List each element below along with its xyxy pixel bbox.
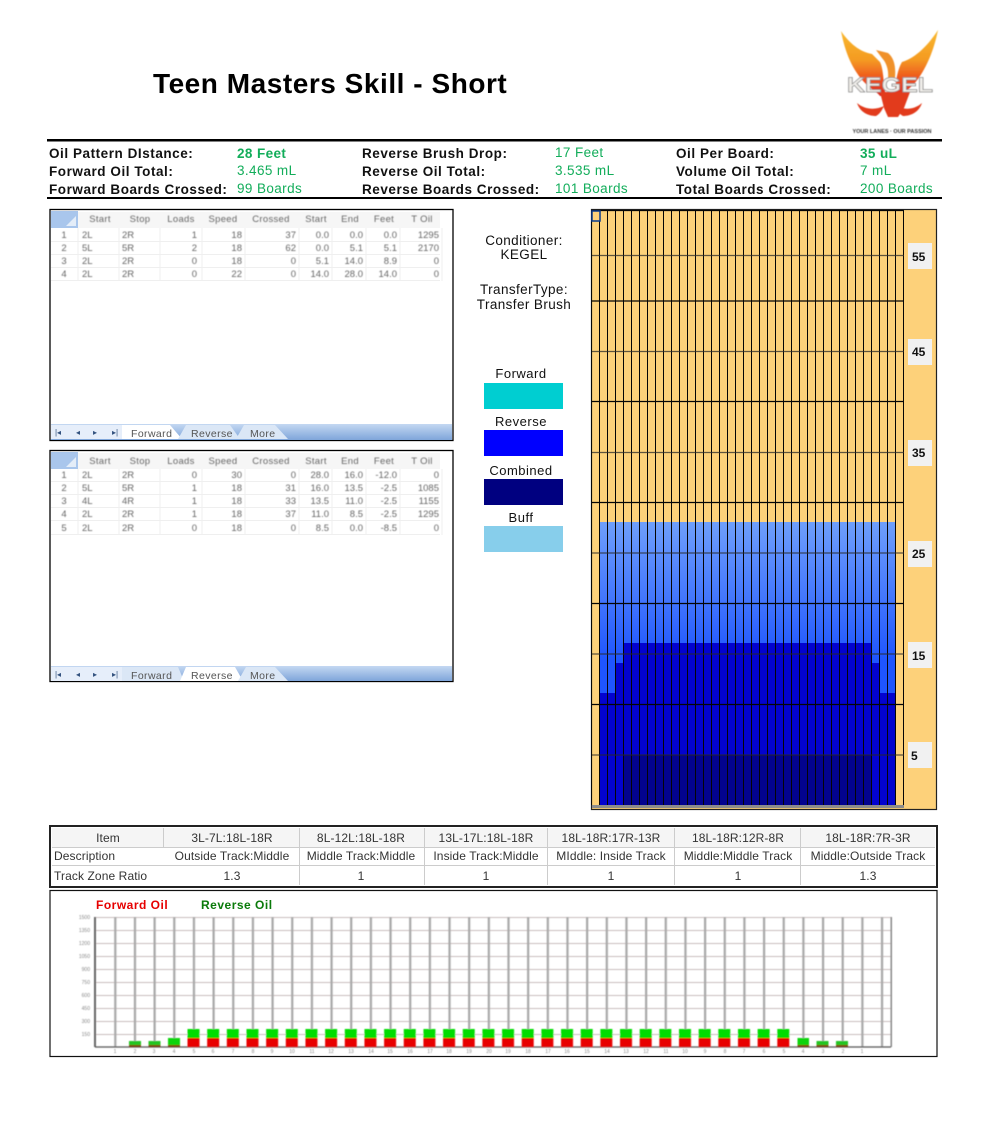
header stats: Forward Oil Total: [49,164,173,179]
panel: reverse table: 11.0 [311,509,329,520]
chart legend: Forward Oil [96,898,168,912]
chart plot: 14 [604,1049,610,1055]
panel: reverse table: 2R [122,523,134,534]
chart plot: 1 [861,1049,864,1055]
distance labels: 15 [912,649,926,663]
chart legend [96,898,273,912]
header stats [49,145,933,197]
panel: forward table: Feet [374,214,394,225]
transfer type text [477,282,571,312]
panel: reverse table: 8.5 [350,509,363,520]
panel: reverse table: 18 [231,509,242,520]
panel: forward table: 2 [192,243,197,254]
panel: reverse table: 2R [122,470,134,481]
header stats: 99 Boards [237,181,302,196]
chart plot: 10 [682,1049,688,1055]
panel: reverse table [50,450,453,682]
panel: reverse table: Start [89,456,111,467]
chart plot: 19 [505,1049,511,1055]
track zone ratio table: 1 [608,869,615,883]
panel: forward table: 62 [285,243,296,254]
panel: reverse table: 37 [285,509,296,520]
panel: forward table: 2R [122,269,134,280]
panel: reverse table: 0 [192,523,197,534]
panel: reverse table: Loads [167,456,195,467]
chart plot: 12 [328,1049,334,1055]
track zone ratio table: 18L-18R:12R-8R [692,831,784,845]
lane board lines [591,210,904,805]
panel: reverse table: 4 [61,509,67,520]
distance labels: 35 [912,446,926,460]
track zone ratio table: 8L-12L:18L-18R [317,831,405,845]
panel: reverse table: 18 [231,483,242,494]
header stats: Volume Oil Total: [676,164,794,179]
panel: forward table: 28.0 [344,269,363,280]
track zone ratio table: 13L-17L:18L-18R [439,831,534,845]
panel: forward table: Speed [209,214,237,225]
chart plot: 450 [82,1006,90,1012]
panel: forward table: 5.1 [316,256,329,267]
header rule top [47,139,942,142]
legend: Combined [489,463,553,478]
panel: forward table: 0.0 [350,230,363,241]
header stats: Forward Boards Crossed: [49,182,227,197]
conditioner text: Conditioner: [485,233,563,248]
track zone ratio table: 18L-18R:17R-13R [562,831,661,845]
panel: reverse table: 33 [285,496,296,507]
chart plot: 11 [663,1049,669,1055]
panel: forward table: Start [89,214,111,225]
panel: reverse table: 0 [434,523,439,534]
panel: forward table: 5R [122,243,134,254]
panel: reverse table: T Oil [411,456,433,467]
header stats: Reverse Oil Total: [362,164,486,179]
tab bar: reverse: |◂ [55,670,61,679]
chart plot: 13 [623,1049,629,1055]
distance labels: 55 [912,250,926,264]
chart plot: 300 [82,1019,90,1025]
panel: forward table: 3 [61,256,67,267]
track zone ratio table: 1 [358,869,365,883]
transfer type text: TransferType: [480,282,568,297]
panel: forward table: 5.1 [384,243,397,254]
panel: forward table: Stop [130,214,150,225]
panel: forward table: 14.0 [378,269,397,280]
track zone ratio table: Track Zone Ratio [54,869,147,883]
chart plot: 7 [232,1049,235,1055]
tab bar: forward: |◂ [55,428,61,437]
panel: forward table: 37 [285,230,296,241]
panel: forward table: 5.1 [350,243,363,254]
chart plot: 4 [802,1049,805,1055]
panel: reverse table: -8.5 [381,523,397,534]
panel: forward table: 0.0 [316,243,329,254]
chart plot: 20 [486,1049,492,1055]
chart plot: 8 [724,1049,727,1055]
panel: reverse table: 8.5 [316,523,329,534]
header stats: 35 uL [860,146,897,161]
track zone ratio table [50,826,937,887]
header stats: Oil Per Board: [676,146,774,161]
panel: reverse table: -2.5 [381,483,397,494]
panel: reverse table: -2.5 [381,509,397,520]
panel: forward table: 14.0 [344,256,363,267]
panel: forward table: 22 [231,269,242,280]
chart plot: 1050 [79,954,90,960]
header stats: Oil Pattern DIstance: [49,146,193,161]
chart plot: 18 [446,1049,452,1055]
legend [484,366,563,552]
panel: reverse table: Crossed [252,456,290,467]
chart plot: 900 [82,967,90,973]
panel: reverse table: 1 [61,470,67,481]
panel: forward table: End [341,214,359,225]
chart plot: 13 [348,1049,354,1055]
transfer type text: Transfer Brush [477,297,571,312]
legend: Buff [509,510,533,525]
panel: reverse table: 3 [61,496,67,507]
panel: reverse table: 11.0 [345,496,363,507]
oil: forward medium layer [599,643,896,805]
panel: reverse table: -12.0 [375,470,397,481]
track zone ratio table: 1.3 [860,869,877,883]
tab bar: forward: Reverse [191,428,233,440]
distance labels: 5 [911,749,918,763]
chart plot: 7 [743,1049,746,1055]
panel: forward table: 0 [434,269,439,280]
tab bar: reverse: ▸ [93,670,97,679]
header stats: 28 Feet [237,146,286,161]
track zone ratio table: Outside Track:Middle [175,849,290,863]
oil bar chart panel [50,890,937,1056]
header stats: 101 Boards [555,181,628,196]
chart plot: 12 [643,1049,649,1055]
panel: reverse table: 4L [82,496,93,507]
panel: reverse table: 2R [122,509,134,520]
panel: forward table: 1 [61,230,67,241]
panel: reverse table: Speed [209,456,237,467]
tab bar: reverse: Forward [131,670,172,682]
chart plot: 2 [842,1049,845,1055]
chart plot: 3 [822,1049,825,1055]
panel: forward table: 14.0 [310,269,329,280]
panel: reverse table: 5R [122,483,134,494]
chart plot: 10 [289,1049,295,1055]
panel: forward table: 8.9 [384,256,397,267]
tab bar: reverse [51,666,452,682]
panel: reverse table: 2 [61,483,67,494]
panel: reverse table: End [341,456,359,467]
legend: Forward [495,366,547,381]
chart plot: 6 [763,1049,766,1055]
panel: reverse table: 1 [192,483,197,494]
tab bar: forward: More [250,428,276,440]
oil: combined dark layer [623,755,872,805]
panel: reverse table: 31 [285,483,296,494]
tab bar: forward: Forward [131,428,172,440]
oil: reverse light layer [599,522,896,805]
panel: reverse table: 0 [291,523,296,534]
panel: forward table: 1 [192,230,197,241]
chart plot [79,915,892,1055]
chart plot: 1200 [79,941,90,947]
chart plot: 5 [193,1049,196,1055]
logo: Kegel phoenix: YOUR LANES · OUR PASSION [852,129,932,135]
track zone ratio table: 1 [735,869,742,883]
panel: reverse table: 2L [82,470,93,481]
panel: forward table: 4 [61,269,67,280]
tab bar: reverse: ◂ [76,670,80,679]
header stats: 17 Feet [555,145,604,160]
chart plot: 14 [368,1049,374,1055]
track zone ratio table: Middle:Outside Track [811,849,926,863]
distance lines: labelled [592,256,904,755]
chart plot: 600 [82,993,90,999]
chart plot: 9 [704,1049,707,1055]
panel: forward table: 18 [231,256,242,267]
chart plot: 5 [783,1049,786,1055]
chart plot: 8 [252,1049,255,1055]
chart plot: 750 [82,980,90,986]
distance labels [908,243,932,768]
panel: reverse table: 4R [122,496,134,507]
track zone ratio table: 1.3 [224,869,241,883]
track zone ratio table: Item [96,831,120,845]
chart plot: 1350 [79,928,90,934]
chart plot: 16 [564,1049,570,1055]
chart plot: 11 [309,1049,315,1055]
tab bar: reverse: ▸| [112,670,118,679]
panel: forward table: 2L [82,256,93,267]
panel: reverse table: 2L [82,523,93,534]
conditioner text [485,233,563,262]
panel: reverse table: 1 [192,496,197,507]
panel: forward table: 0 [291,256,296,267]
panel: forward table: 0 [192,256,197,267]
panel: forward table: 2R [122,230,134,241]
panel: reverse table: 1085 [418,483,439,494]
track zone ratio table: 3L-7L:18L-18R [191,831,273,845]
panel: forward table: Start [305,214,327,225]
track zone ratio table: Middle:Middle Track [684,849,793,863]
track zone ratio table: MIddle: Inside Track [556,849,667,863]
panel: forward table: 18 [231,230,242,241]
header stats: 3.535 mL [555,163,615,178]
header stats: Reverse Boards Crossed: [362,182,540,197]
panel: forward table: 2L [82,230,93,241]
track zone ratio table: 18L-18R:7R-3R [825,831,911,845]
panel: reverse table: 13.5 [310,496,329,507]
panel: reverse table: Start [305,456,327,467]
panel: forward table: 0.0 [316,230,329,241]
panel: reverse table: 1 [192,509,197,520]
tab bar: forward [51,424,452,440]
chart plot: 19 [466,1049,472,1055]
panel: reverse table: 0 [192,470,197,481]
distance lines: black [592,210,904,704]
panel: reverse table: Stop [130,456,150,467]
tab bar: forward: ◂ [76,428,80,437]
chart plot: 4 [173,1049,176,1055]
chart plot: 3 [153,1049,156,1055]
panel: reverse table: 1155 [419,496,439,507]
panel: reverse table: 2L [82,509,93,520]
track zone ratio table: Description [54,849,115,863]
panel: forward table: 2170 [418,243,439,254]
chart plot: 1500 [79,915,90,921]
header rule bottom [47,197,942,199]
panel: forward table: 5L [82,243,93,254]
panel: reverse table: -2.5 [381,496,397,507]
panel: reverse table: 18 [231,496,242,507]
panel: reverse table: 16.0 [310,483,329,494]
tab bar: reverse: More [250,670,276,682]
logo: Kegel phoenix [841,30,938,135]
chart plot: 15 [584,1049,590,1055]
conditioner text: KEGEL [500,247,548,262]
panel: forward table: 0 [291,269,296,280]
panel: forward table: 2L [82,269,93,280]
chart plot: 9 [271,1049,274,1055]
chart plot: 2 [134,1049,137,1055]
header stats: 200 Boards [860,181,933,196]
chart plot: 18 [525,1049,531,1055]
panel: reverse table: 5L [82,483,93,494]
panel: reverse table: 5 [61,523,67,534]
panel: reverse table: Feet [374,456,394,467]
panel: forward table: 0 [192,269,197,280]
lane oil chart [591,210,936,810]
tab bar: forward: ▸| [112,428,118,437]
panel: forward table: 1295 [418,230,439,241]
chart plot: 16 [407,1049,413,1055]
header stats: Reverse Brush Drop: [362,146,508,161]
panel: reverse table: 28.0 [310,470,329,481]
chart legend: Reverse Oil [201,898,273,912]
chart plot: 17 [427,1049,433,1055]
panel: reverse table: 30 [231,470,242,481]
header stats: Total Boards Crossed: [676,182,831,197]
panel: reverse table: 0 [291,470,296,481]
tab bar: reverse: Reverse [191,670,233,682]
panel: forward table: 0 [434,256,439,267]
distance labels: 45 [912,345,926,359]
panel: forward table: Crossed [252,214,290,225]
panel: reverse table: 18 [231,523,242,534]
distance labels: 25 [912,547,926,561]
legend: Reverse [495,414,547,429]
header stats: 3.465 mL [237,163,297,178]
panel: reverse table: 1295 [418,509,439,520]
tab bar: forward: ▸ [93,428,97,437]
chart plot: 17 [545,1049,551,1055]
header stats: 7 mL [860,163,892,178]
track zone ratio table: 1 [483,869,490,883]
title: Teen Masters Skill - Short [153,68,507,99]
chart plot: 15 [387,1049,393,1055]
panel: forward table: 2 [61,243,67,254]
panel: reverse table: 0 [434,470,439,481]
panel: reverse table: 13.5 [344,483,363,494]
panel: forward table [50,210,453,440]
panel: forward table: 0.0 [384,230,397,241]
panel: forward table: 18 [231,243,242,254]
logo: Kegel phoenix: KEGEL [847,74,933,97]
chart plot: 1 [114,1049,117,1055]
panel: forward table: 2R [122,256,134,267]
chart plot: 6 [212,1049,215,1055]
chart plot: 150 [82,1032,90,1038]
panel: forward table: Loads [167,214,195,225]
panel: reverse table: 16.0 [344,470,363,481]
panel: reverse table: 0.0 [350,523,363,534]
track zone ratio table: Inside Track:Middle [433,849,539,863]
track zone ratio table: Middle Track:Middle [307,849,416,863]
panel: forward table: T Oil [411,214,433,225]
